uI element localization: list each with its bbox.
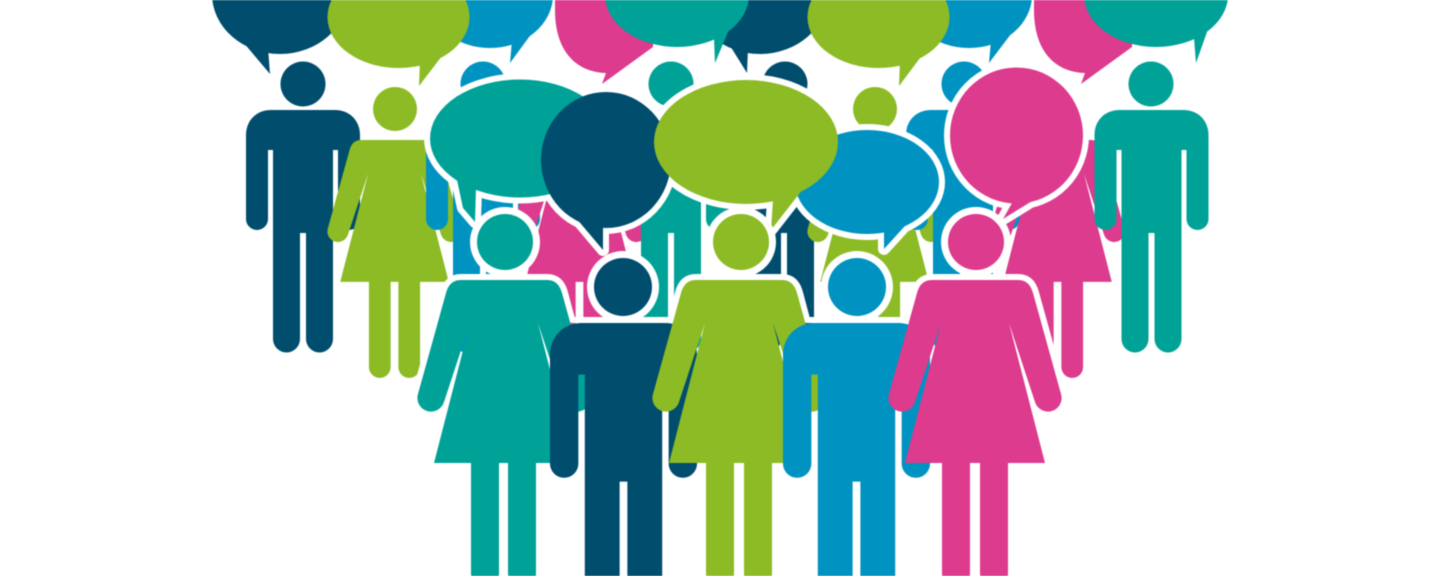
bubble: teal front <box>430 80 610 222</box>
bubble: green top 2 <box>808 0 950 86</box>
person: blue man back <box>426 62 540 352</box>
top row speech bubbles, right set <box>692 0 1228 86</box>
person: blue man front <box>783 251 930 576</box>
bubble: magenta top 2 <box>1034 0 1132 84</box>
person: magenta woman front <box>888 207 1062 576</box>
person: teal man back <box>614 62 728 352</box>
bubble: teal top 2 <box>1084 0 1228 63</box>
person: navy man back 2 <box>727 62 841 352</box>
white outline behind front speech bubbles <box>430 68 1083 250</box>
top row speech bubbles, left set <box>212 0 749 86</box>
bubble: blue front <box>795 130 939 249</box>
bubble: teal top 1 <box>605 0 749 63</box>
person: navy man back <box>246 62 360 352</box>
bubble: navy top 2 <box>692 0 828 73</box>
person: blue man back 2 <box>906 62 1020 352</box>
bubble: green top 1 <box>328 0 470 86</box>
bubble: navy top 1 <box>212 0 348 74</box>
person: green woman front <box>652 207 826 576</box>
person: magenta woman back 2 <box>990 87 1125 378</box>
front speech bubbles <box>430 68 1083 250</box>
person: green woman back <box>327 87 462 378</box>
person: green woman back 2 <box>807 87 942 378</box>
bubble: magenta front <box>950 68 1083 219</box>
bubble: green front <box>654 80 838 230</box>
back row of people <box>246 62 1208 378</box>
bubble: blue top 2 <box>906 0 1032 63</box>
bubble: blue top 1 <box>427 0 553 63</box>
front row of people <box>417 207 1062 576</box>
bubble: magenta top 1 <box>555 0 653 84</box>
person: teal man back 2 <box>1094 62 1208 352</box>
person: navy man front <box>550 251 697 576</box>
person: teal woman front <box>417 207 591 576</box>
bubble: navy front <box>541 92 671 250</box>
person: magenta woman back <box>512 91 647 378</box>
